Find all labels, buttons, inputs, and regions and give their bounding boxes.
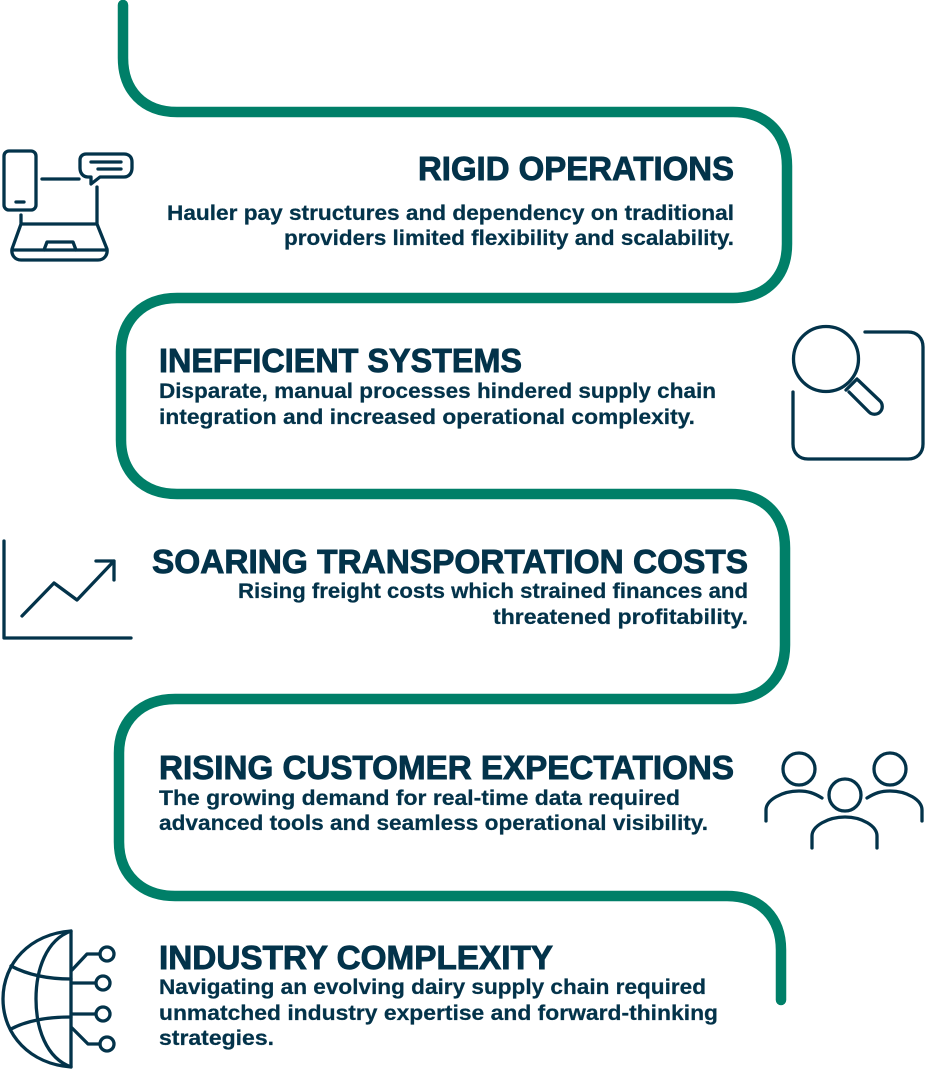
text: industry complexity description: unmatched industry expertise and forward-thinking [159,1002,718,1025]
icon: phone, laptop and chat [4,151,132,260]
text: soaring costs description [238,580,748,629]
text: soaring costs description: Rising freight costs which strained finances and [238,580,748,603]
text: industry complexity description [159,976,718,1050]
text: inefficient systems description [159,380,716,429]
heading: inefficient systems: INEFFICIENT SYSTEMS [159,342,522,379]
text: inefficient systems description: integration and increased operational complexity. [159,406,695,429]
text: inefficient systems description: Disparate, manual processes hindered supply chain [159,380,716,403]
heading: rigid operations: RIGID OPERATIONS [418,150,734,187]
heading: industry complexity: INDUSTRY COMPLEXITY [159,939,553,976]
text: rigid operations description: Hauler pay structures and dependency on traditional [167,202,734,225]
heading: soaring transportation costs: SOARING TRANSPORTATION COSTS [152,543,748,580]
text: industry complexity description: strategies. [159,1027,274,1050]
icon: magnifying glass [793,326,923,459]
winding green path [119,5,787,1000]
heading: rising customer expectations: RISING CUSTOMER EXPECTATIONS [159,749,734,786]
icon: rising line chart [4,541,131,638]
text: customer expectations description [159,787,708,835]
text: customer expectations description: advanced tools and seamless operational visibility. [159,812,708,835]
text: customer expectations description: The growing demand for real-time data required [159,787,680,810]
text: industry complexity description: Navigating an evolving dairy supply chain required [159,976,706,999]
text: rigid operations description: providers limited flexibility and scalability. [284,227,734,250]
icon: group of people [766,753,922,848]
icon: half globe with nodes [3,931,114,1067]
text: soaring costs description: threatened profitability. [493,606,748,629]
text: rigid operations description [167,202,734,250]
